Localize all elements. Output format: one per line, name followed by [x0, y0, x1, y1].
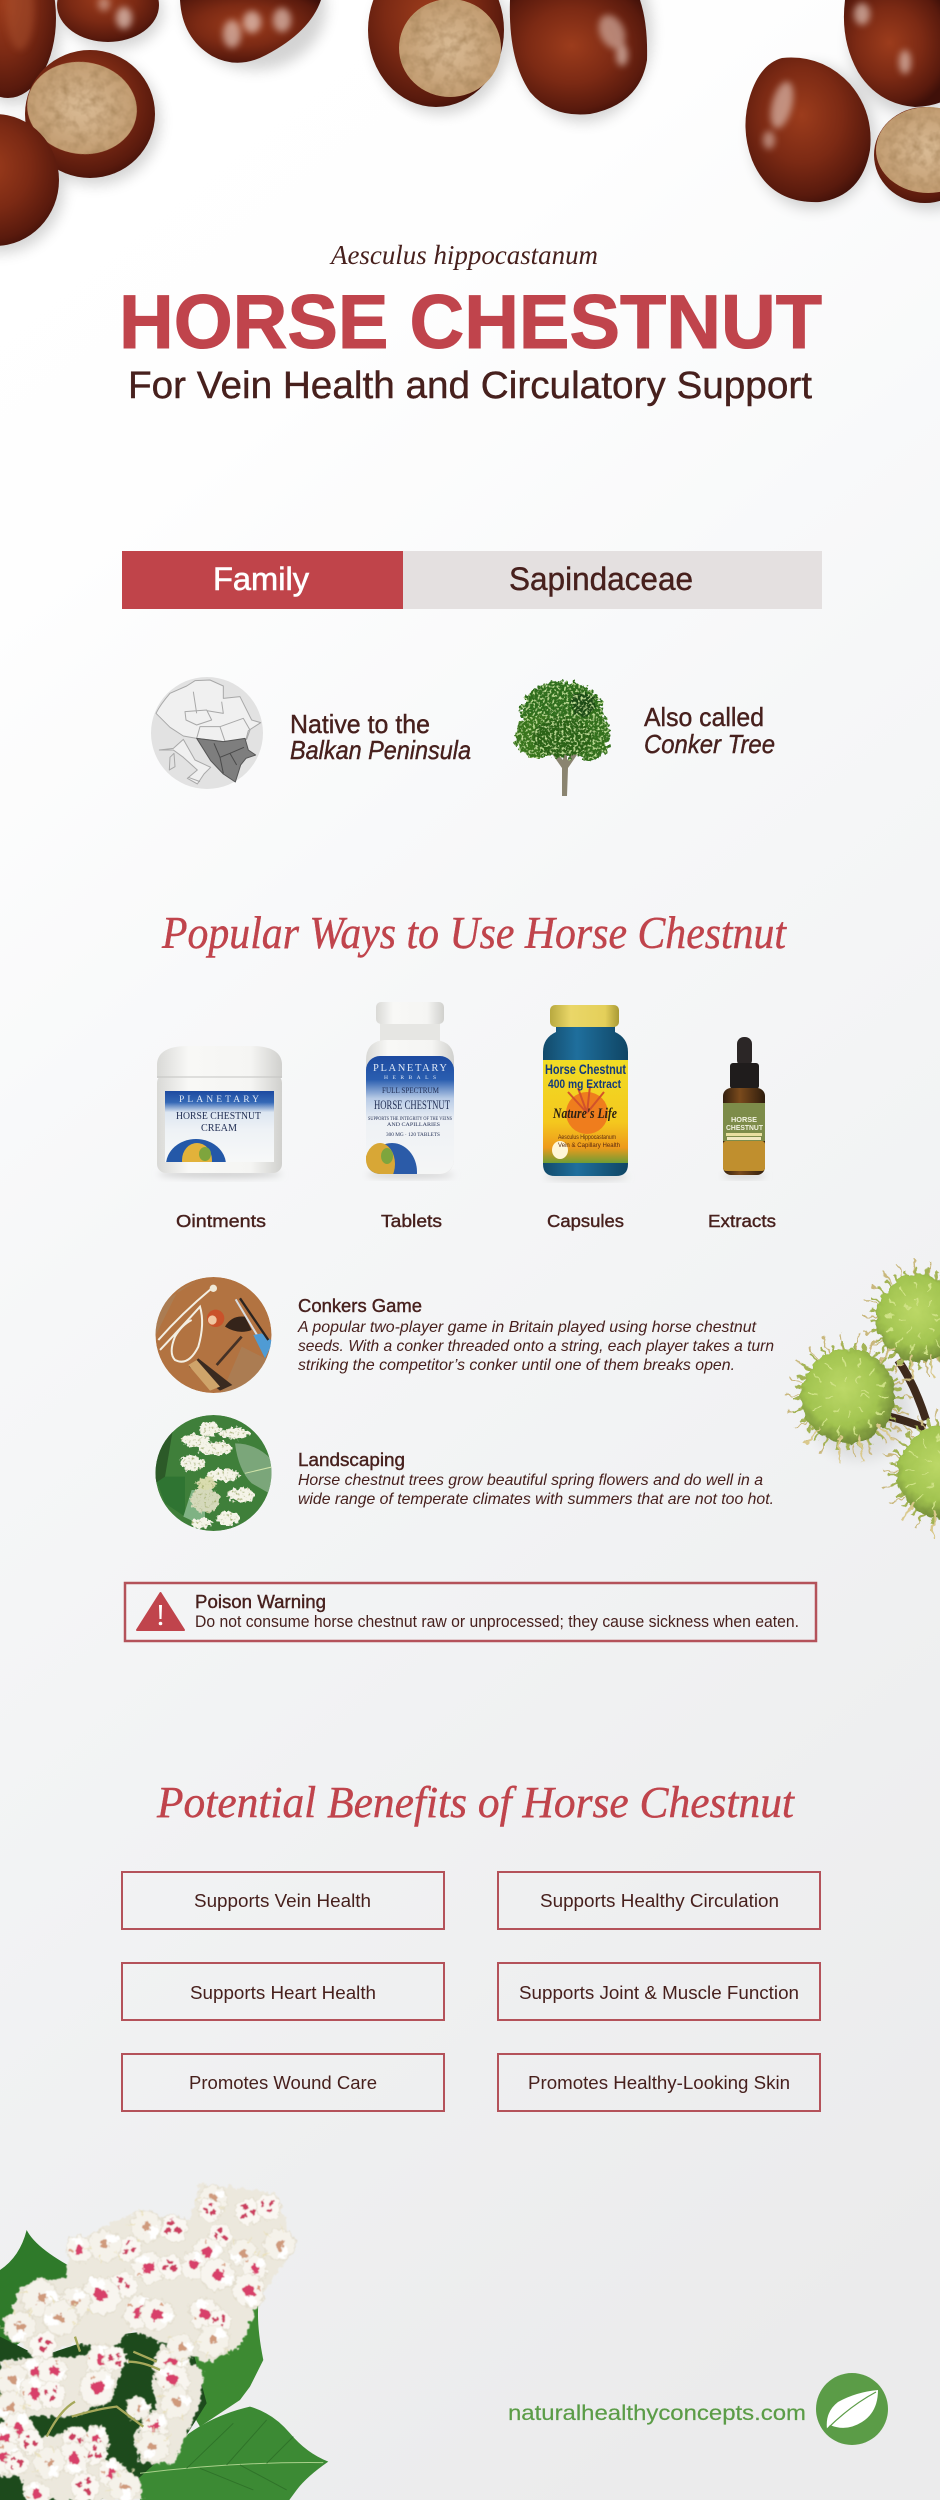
heading: potential benefits: Potential Benefits of Horse Chestnut — [156, 1778, 796, 1827]
botanical name: Aesculus hippocastanum — [329, 240, 598, 270]
burr: top — [872, 1270, 940, 1381]
product: ointment jar: HORSE CHESTNUT — [176, 1110, 261, 1122]
product: ointment jar: CREAM — [201, 1122, 237, 1134]
warning heading: Poison Warning — [195, 1592, 326, 1612]
product: capsules bottle — [543, 1005, 628, 1180]
text: conkers game: Conkers Game — [298, 1296, 422, 1316]
benefit: joint and muscle — [498, 1963, 820, 2020]
product: capsules bottle: Vein & Capillary Health — [558, 1142, 620, 1149]
product: capsules bottle: Horse Chestnut — [545, 1061, 626, 1077]
product: tablets bottle: SUPPORTS THE INTEGRITY OF THE VEINS — [368, 1117, 452, 1122]
native text: Native to the — [290, 709, 430, 739]
product: capsules bottle: Nature's Life — [552, 1106, 617, 1122]
benefit: wound care: Promotes Wound Care — [189, 2073, 377, 2093]
benefit: joint and muscle: Supports Joint & Muscle Function — [519, 1983, 799, 2003]
product: extract dropper — [722, 1037, 766, 1178]
spiky green burrs on right edge — [797, 1270, 940, 1538]
website: naturalhealthyconcepts.com — [508, 2402, 806, 2425]
family label: Family — [213, 561, 309, 597]
benefit: circulation: Supports Healthy Circulation — [540, 1891, 779, 1911]
leaf: right — [167, 2305, 263, 2427]
text: conkers game — [297, 1296, 774, 1374]
benefit grid — [122, 1872, 820, 2111]
benefit: vein: Supports Vein Health — [194, 1891, 371, 1911]
leaf: dark foliage behind flowers — [0, 2327, 207, 2500]
chestnut with hilum, far right — [874, 107, 940, 203]
also called text: Conker Tree — [644, 729, 775, 759]
family bar — [122, 551, 822, 609]
chestnut with pale hilum, left — [21, 50, 155, 178]
product: ointment jar — [157, 1046, 282, 1191]
benefit: wound care — [122, 2054, 444, 2111]
also called text: Also called — [644, 702, 764, 732]
benefit: circulation — [498, 1872, 820, 1929]
product labels: Capsules — [547, 1211, 624, 1231]
product labels: Ointments — [176, 1211, 266, 1231]
chestnut top right — [844, 0, 940, 107]
main title: HORSE CHESTNUT — [119, 280, 822, 365]
text: conkers game: striking the competitor’s conker until one of them breaks open. — [298, 1357, 735, 1374]
warning text: Do not consume horse chestnut raw or unprocessed; they cause sickness when eaten. — [195, 1613, 799, 1631]
product: tablets bottle: HORSE CHESTNUT — [374, 1097, 450, 1112]
text: conkers game: A popular two-player game in Britain played using horse chestnut — [297, 1319, 757, 1336]
icon: warning triangle — [137, 1593, 184, 1630]
subtitle: For Vein Health and Circulatory Support — [128, 365, 812, 407]
logo: leaf in circle — [816, 2373, 888, 2445]
heading: popular ways: Popular Ways to Use Horse Chestnut — [161, 908, 787, 958]
product labels: Tablets — [381, 1211, 442, 1231]
chestnut small top — [57, 0, 159, 42]
product: capsules bottle: Aesculus Hippocastanum — [558, 1134, 616, 1141]
flowers and leaves, bottom left — [0, 2181, 328, 2500]
chestnut lower left — [0, 114, 59, 246]
product: capsules bottle: 400 mg Extract — [548, 1079, 621, 1091]
product labels: Extracts — [708, 1211, 776, 1231]
text: landscaping: wide range of temperate climates with summers that are not too hot. — [298, 1491, 774, 1508]
product: ointment jar: PLANETARY — [179, 1095, 259, 1105]
leaf: upper left — [0, 2230, 83, 2357]
chestnut right — [745, 58, 871, 202]
benefit: vein — [122, 1872, 444, 1929]
text: landscaping — [298, 1450, 774, 1508]
tree icon — [515, 681, 610, 796]
benefit: skin — [498, 2054, 820, 2111]
benefit: heart — [122, 1963, 444, 2020]
product: tablets bottle: AND CAPILLARIES — [387, 1123, 440, 1128]
map icon: Balkan Peninsula — [151, 677, 263, 789]
family value: Sapindaceae — [509, 561, 693, 597]
burr: middle — [797, 1345, 899, 1463]
product: tablets bottle: FULL SPECTRUM — [382, 1086, 439, 1095]
product: tablets bottle: HERBALS — [384, 1075, 436, 1081]
leaf: large bottom — [137, 2407, 328, 2500]
native text — [290, 709, 471, 765]
green stems — [47, 2337, 160, 2437]
product: tablets bottle — [366, 1002, 454, 1180]
also called text — [644, 702, 775, 759]
photo: landscaping flowers — [155, 1415, 275, 1531]
title block — [119, 240, 822, 407]
chestnut centre-right — [510, 0, 647, 115]
chestnut top centre-left — [180, 0, 321, 63]
product: tablets bottle: 300 MG · 120 TABLETS — [386, 1133, 440, 1138]
product labels — [176, 1211, 776, 1231]
product: tablets bottle: PLANETARY — [373, 1063, 447, 1074]
flower clusters — [0, 2181, 301, 2500]
burr: bottom — [893, 1422, 940, 1538]
product: extract dropper: CHESTNUT — [726, 1123, 763, 1132]
photo: conkers game — [155, 1277, 275, 1393]
text: landscaping: Horse chestnut trees grow beautiful spring flowers and do well in a — [298, 1472, 763, 1489]
chestnuts along the top edge — [0, 0, 940, 253]
product: extract dropper: HORSE — [731, 1115, 757, 1124]
chestnut top-left — [0, 0, 56, 98]
benefit: heart: Supports Heart Health — [190, 1983, 376, 2003]
benefit: skin: Promotes Healthy-Looking Skin — [528, 2073, 790, 2093]
text: conkers game: seeds. With a conker threaded onto a string, each player takes a turn — [298, 1338, 774, 1355]
native text: Balkan Peninsula — [290, 735, 471, 765]
text: landscaping: Landscaping — [298, 1450, 405, 1470]
poison warning box — [125, 1583, 816, 1641]
chestnut with pale hilum, centre — [368, 0, 504, 107]
